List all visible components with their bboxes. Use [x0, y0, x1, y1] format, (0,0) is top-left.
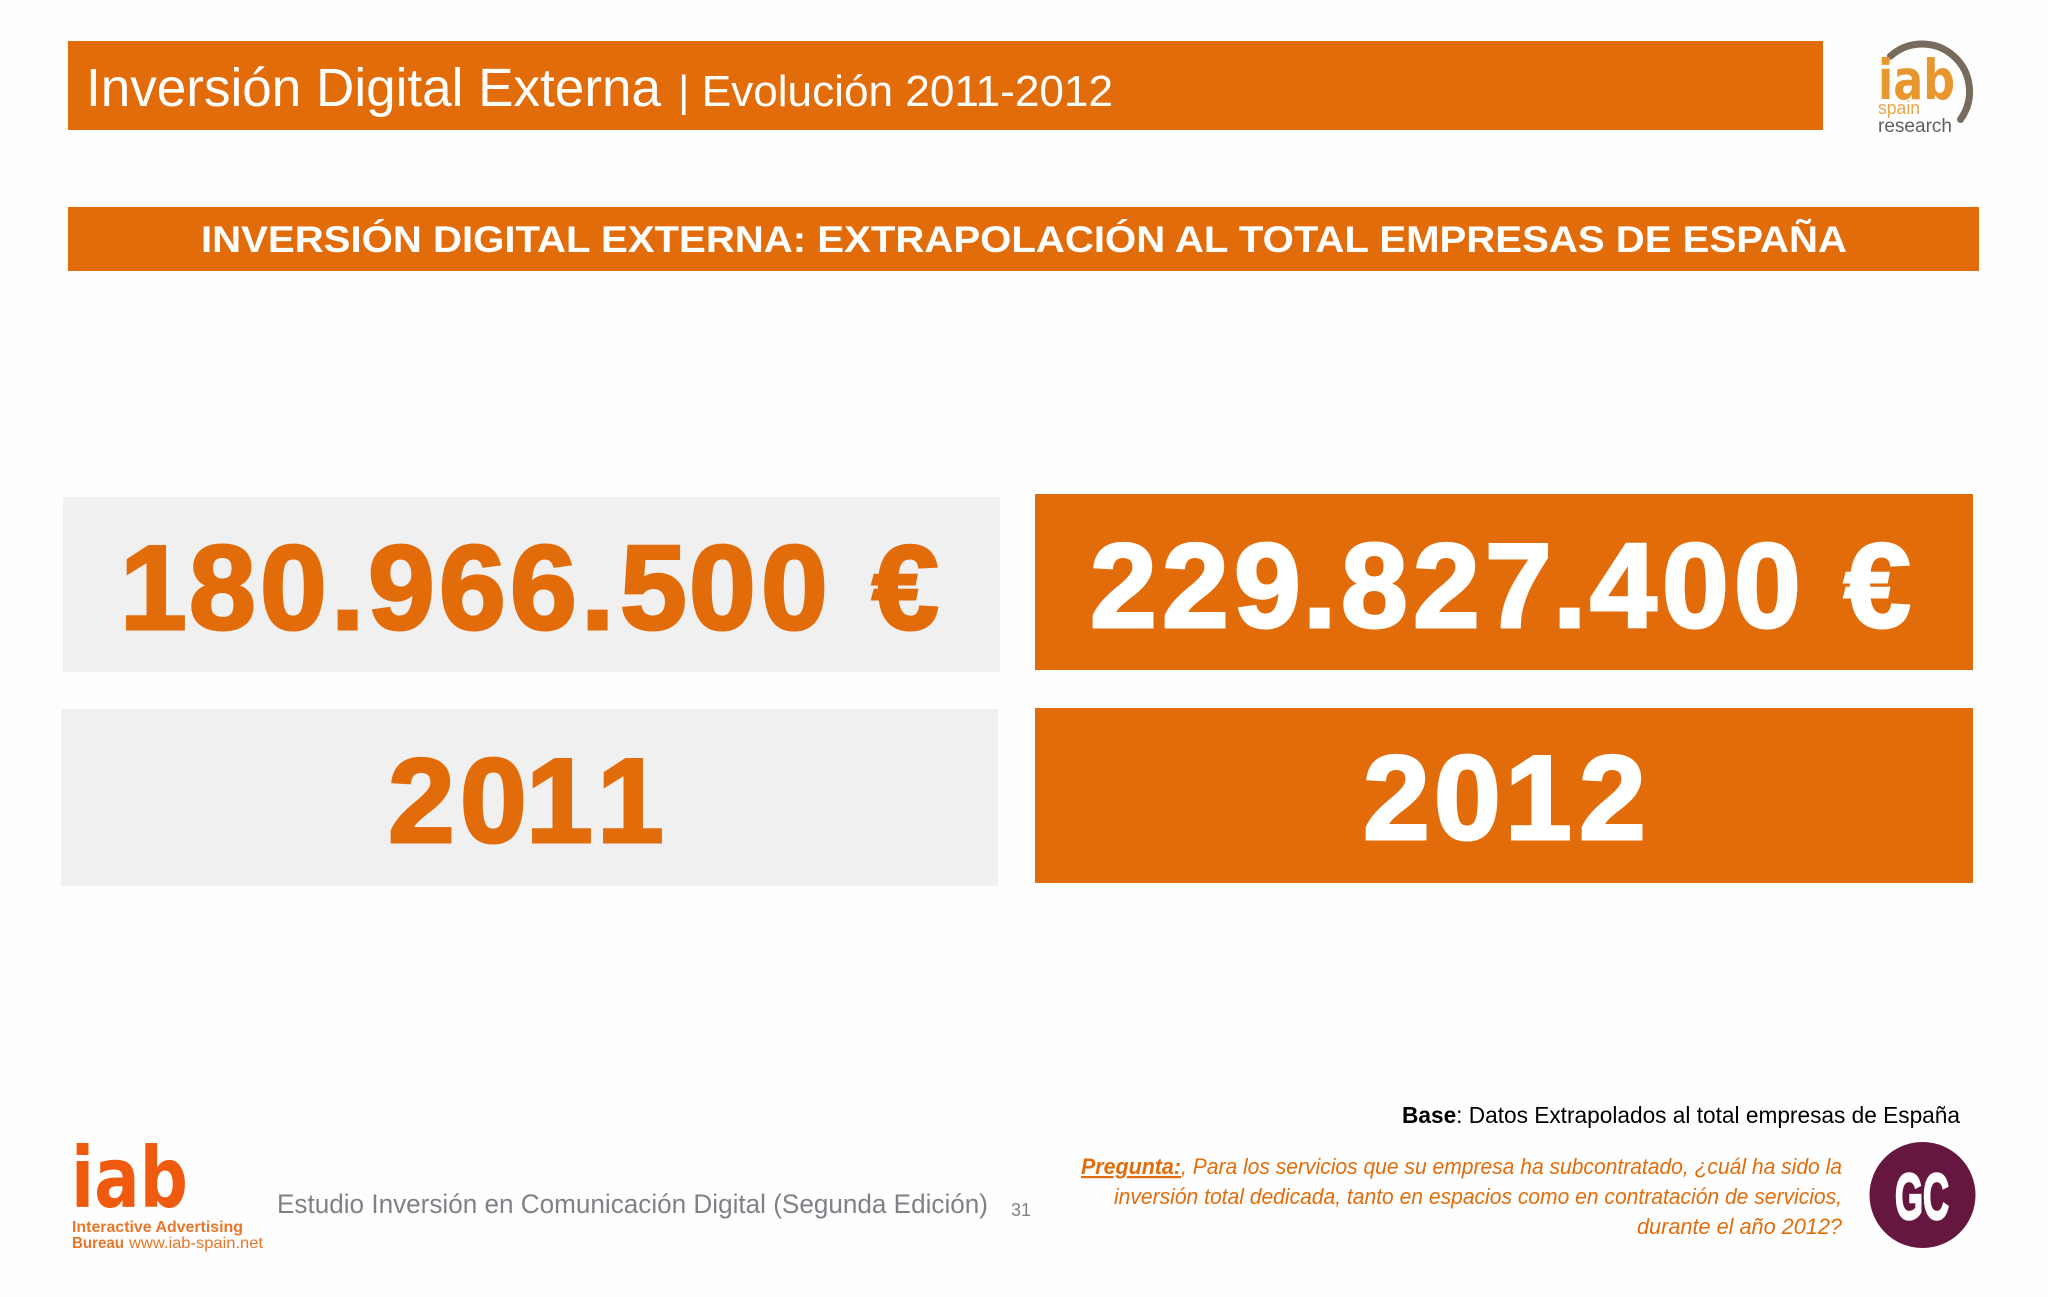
logo: iab spain research: research [1878, 116, 1952, 137]
question note: Pregunta: [1081, 1154, 1181, 1179]
question note: , Para los servicios que su empresa ha subcontratado, ¿cuál ha sido la [1181, 1154, 1842, 1179]
question note: durante el año 2012? [1637, 1214, 1843, 1239]
year 2012: 2012 [1363, 731, 1646, 865]
logo: iab footer: Interactive Advertising [72, 1219, 243, 1236]
icon: GC badge: GC [1895, 1160, 1949, 1233]
panel: 2012 year [1035, 708, 1973, 883]
section heading: INVERSIÓN DIGITAL EXTERNA: EXTRAPOLACIÓN AL TOTAL EMPRESAS DE ESPAÑA [201, 218, 1847, 260]
logo: iab footer: iab [71, 1129, 188, 1227]
section banner [68, 207, 1979, 271]
title: Inversión Digital Externa [86, 58, 662, 118]
subtitle: | Evolución 2011-2012 [678, 67, 1113, 116]
panel: 2011 amount [63, 497, 1000, 672]
panel: 2012 amount [1035, 494, 1973, 670]
panel: 2011 year [61, 709, 998, 886]
logo: iab spain research: spain [1878, 98, 1920, 118]
icon: GC badge [1870, 1142, 1976, 1248]
question note [1081, 1154, 1843, 1239]
value 2011: 180.966.500 € [120, 521, 939, 655]
logo: iab footer: www.iab-spain.net [128, 1235, 264, 1252]
logo: iab footer: Bureau [72, 1235, 124, 1252]
year 2011: 2011 [388, 734, 664, 868]
logo: iab spain research: iab [1878, 48, 1955, 112]
logo: iab spain research [1878, 44, 1970, 137]
question note: inversión total dedicada, tanto en espacios como en contratación de servicios, [1114, 1184, 1842, 1209]
header banner [68, 41, 1823, 130]
logo: iab footer [71, 1129, 264, 1252]
value 2012: 229.827.400 € [1090, 519, 1911, 653]
base note: Base: Datos Extrapolados al total empresas de España [1402, 1102, 1960, 1128]
page number: 31 [1011, 1200, 1031, 1220]
footer study title: Estudio Inversión en Comunicación Digital (Segunda Edición) [277, 1189, 988, 1219]
